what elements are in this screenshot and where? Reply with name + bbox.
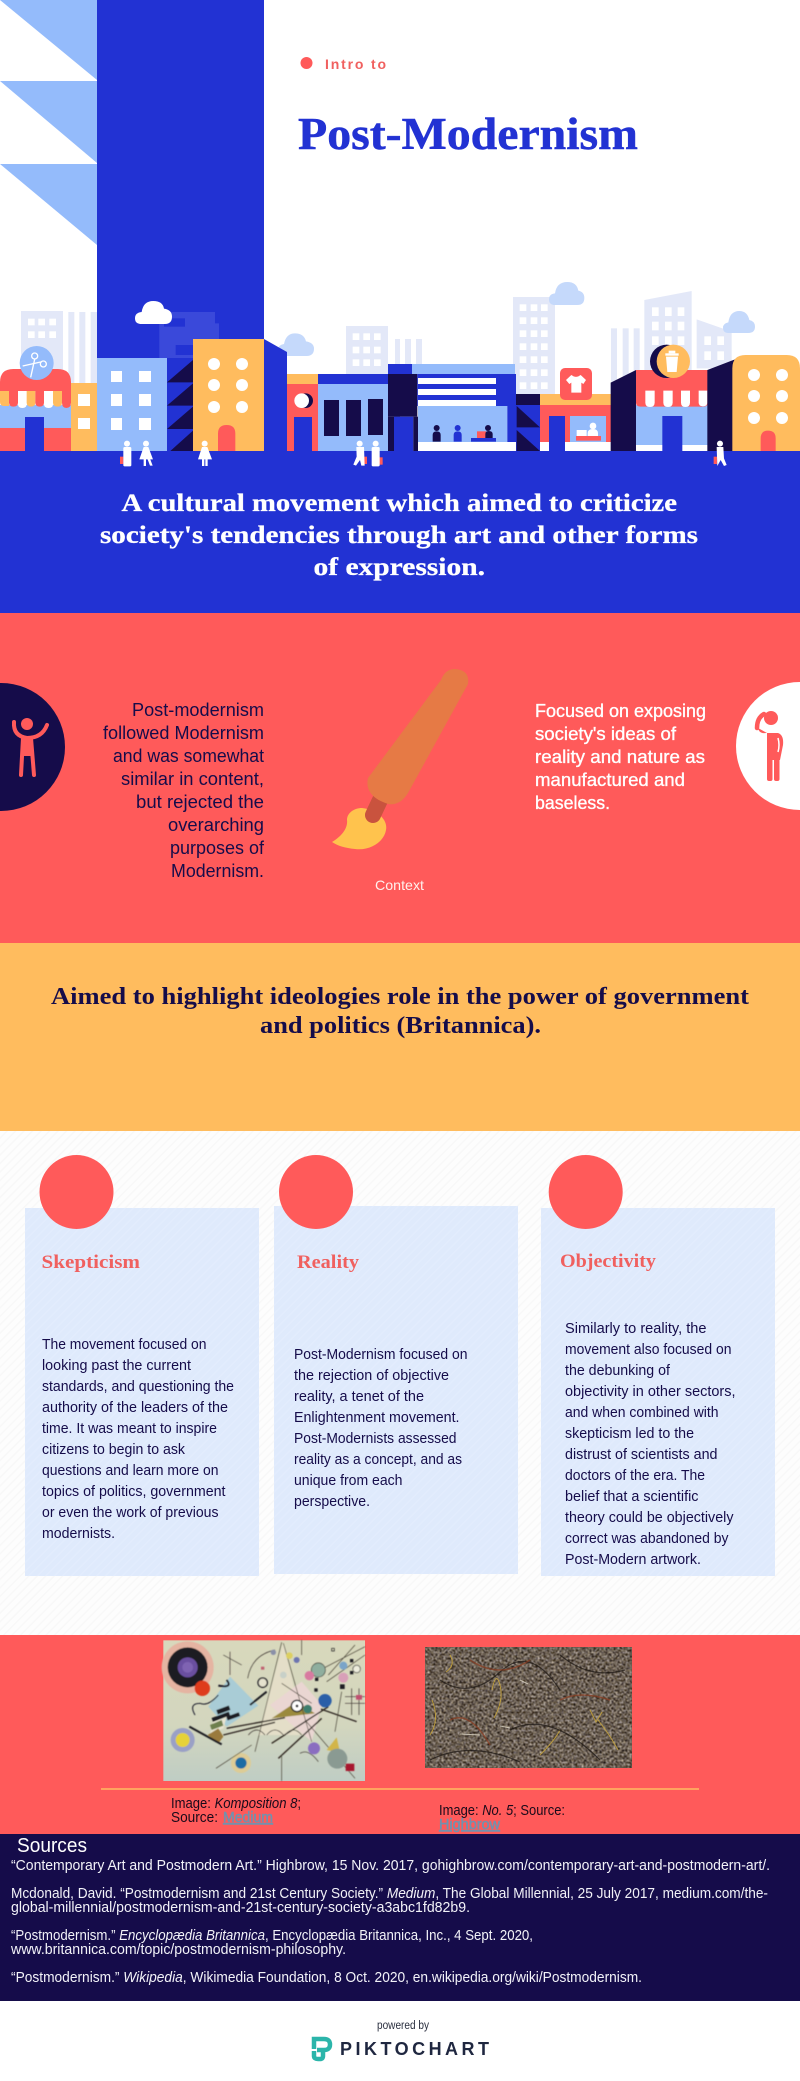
yellow small building [71, 383, 97, 451]
yellow tall building [193, 339, 287, 451]
body: Reality [294, 1347, 468, 1510]
intro statement: A cultural movement which aimed to criticize [122, 490, 677, 517]
light blue building [97, 358, 167, 451]
statement text: Aimed to highlight ideologies role in the power of government [51, 984, 749, 1010]
body: Skepticism: modernists. [42, 1526, 115, 1542]
left text: Post-modernism [132, 699, 264, 720]
icon: coffee cup [650, 345, 690, 378]
card: Objectivity [541, 1155, 775, 1576]
body: Skepticism: authority of the leaders of the [42, 1400, 228, 1416]
body: Objectivity: Post-Modern artwork. [565, 1552, 701, 1568]
pale building windows [28, 319, 381, 366]
body: Objectivity: distrust of scientists and [565, 1447, 718, 1463]
left text: Modernism. [171, 860, 264, 881]
body: Skepticism: topics of politics, government [42, 1484, 226, 1500]
body: Reality: the rejection of objective [294, 1368, 449, 1384]
intro statement [100, 490, 698, 581]
references: “Postmodernism.” Encyclopædia Britannica, Encyclopædia Britannica, Inc., 4 Sept. 2020, [11, 1927, 533, 1944]
panel: yellow statement [0, 943, 800, 1131]
panel: concepts [0, 1131, 800, 1635]
body: Skepticism: time. It was meant to inspire [42, 1421, 217, 1437]
references: “Contemporary Art and Postmodern Art.” Highbrow, 15 Nov. 2017, gohighbrow.com/contemporary-art-and-postmodern-art/. [11, 1857, 770, 1874]
caption: No. 5: Highbrow [439, 1816, 500, 1833]
right text: Focused on exposing [535, 700, 706, 721]
body: Reality: Post-Modernism focused on [294, 1347, 468, 1363]
right text: reality and nature as [535, 746, 705, 767]
body: Skepticism: The movement focused on [42, 1337, 206, 1353]
right text: society's ideas of [535, 723, 677, 744]
pale background buildings [21, 311, 400, 384]
cloud pale right [723, 311, 755, 333]
intro label: Intro to [325, 56, 386, 72]
intro statement: society's tendencies through art and other forms [100, 522, 698, 549]
left text [103, 699, 265, 881]
cloud white [135, 301, 172, 324]
body: Objectivity: Similarly to reality, the [565, 1321, 706, 1337]
body: Skepticism: questions and learn more on [42, 1463, 218, 1479]
stairs block [516, 394, 540, 451]
left text: purposes of [170, 837, 265, 858]
mall building [400, 364, 516, 452]
icon: person arms raised [0, 683, 65, 811]
divider line [101, 1788, 699, 1790]
small red store [287, 374, 318, 451]
cloud pale [278, 333, 314, 356]
body: Objectivity: the debunking of [565, 1363, 671, 1379]
icon: paintbrush [332, 669, 468, 849]
right text [535, 700, 706, 813]
pale background buildings [405, 291, 732, 395]
body: Objectivity: correct was abandoned by [565, 1531, 729, 1547]
yellow building right [707, 355, 800, 451]
body: Reality: perspective. [294, 1494, 370, 1510]
intro statement: of expression. [314, 554, 485, 581]
references [10, 1857, 770, 1986]
pale building windows [520, 304, 724, 389]
card: Skepticism [25, 1155, 259, 1576]
mall side [388, 364, 400, 451]
hero header [0, 0, 638, 360]
references: www.britannica.com/topic/postmodernism-philosophy. [10, 1941, 346, 1958]
body: Objectivity: doctors of the era. The [565, 1468, 705, 1484]
image: No. 5 [425, 1647, 632, 1768]
right text: baseless. [535, 792, 610, 813]
sources heading: Sources [17, 1835, 87, 1857]
body: Skepticism: standards, and questioning the [42, 1379, 234, 1395]
body: Reality: reality as a concept, and as [294, 1452, 462, 1468]
icon: Piktochart logo [314, 2039, 330, 2059]
city skyline right [400, 282, 800, 452]
caption: Komposition 8: Source: [171, 1809, 218, 1826]
references: global-millennial/postmodernism-and-21st-century-society-a3abc1fd82b9. [11, 1899, 470, 1916]
body: Reality: unique from each [294, 1473, 402, 1489]
references: Mcdonald, David. “Postmodernism and 21st Century Society.” Medium, The Global Millennial, 25 July 2017, medium.com/the- [11, 1885, 768, 1902]
left text: similar in content, [121, 768, 264, 789]
body: Skepticism [42, 1337, 234, 1542]
body: Skepticism: citizens to begin to ask [42, 1442, 186, 1458]
body: Reality: Enlightenment movement. [294, 1410, 460, 1426]
caption: Komposition 8: Image: Komposition 8; [171, 1795, 301, 1812]
panel: context red [0, 613, 800, 943]
footer: powered by Piktochart [314, 2020, 489, 2059]
references: “Postmodernism.” Wikipedia, Wikimedia Foundation, 8 Oct. 2020, en.wikipedia.org/wiki/Postmodernism. [11, 1969, 642, 1986]
icon: scissors [20, 346, 54, 380]
image: Komposition 8 [162, 1640, 365, 1781]
scissors store [0, 346, 71, 451]
awning store [611, 345, 708, 451]
body: Skepticism: or even the work of previous [42, 1505, 218, 1521]
statement text: and politics (Britannica). [260, 1013, 541, 1039]
icon: person thinking [736, 682, 800, 810]
body: Objectivity: objectivity in other sectors, [565, 1384, 736, 1400]
caption: Komposition 8 [171, 1795, 301, 1826]
decorative triangles [0, 0, 97, 245]
heading: Skepticism: Skepticism [42, 1252, 140, 1273]
body: Objectivity [565, 1321, 736, 1568]
left text: overarching [168, 814, 264, 835]
people on street [120, 441, 727, 466]
body: Objectivity: and when combined with [565, 1405, 718, 1421]
left text: but rejected the [136, 791, 264, 812]
heading: Objectivity: Objectivity [560, 1251, 657, 1272]
caption: No. 5: Image: No. 5; Source: [439, 1802, 565, 1819]
heading: Reality: Reality [297, 1252, 360, 1273]
icon: shirt sign [560, 368, 592, 400]
tone building on column [159, 312, 219, 360]
title: Post-Modernism [298, 109, 638, 159]
statement text [51, 984, 749, 1039]
left text: followed Modernism [103, 722, 264, 743]
stairs block [167, 358, 193, 451]
blue column [97, 0, 264, 360]
body: Objectivity: belief that a scientific [565, 1489, 698, 1505]
panel: intro blue band [0, 441, 800, 613]
body: Objectivity: skepticism led to the [565, 1426, 694, 1442]
card: Reality [274, 1155, 518, 1574]
body: Reality: Post-Modernists assessed [294, 1431, 456, 1447]
panel: artworks [0, 1635, 800, 1834]
caption: Komposition 8: Medium [223, 1809, 273, 1826]
wordmark: PIKTOCHART [340, 2039, 489, 2059]
panel: sources [0, 1834, 800, 2001]
powered by: powered by [377, 2020, 429, 2032]
context label: Context [375, 877, 424, 893]
left text: and was somewhat [113, 745, 264, 766]
light blue store [318, 374, 388, 451]
shirt store [540, 368, 612, 451]
caption: No. 5 [439, 1802, 565, 1833]
body: Objectivity: theory could be objectively [565, 1510, 734, 1526]
right text: manufactured and [535, 769, 685, 790]
city skyline left [0, 301, 400, 451]
cloud pale center [549, 282, 584, 305]
body: Reality: reality, a tenet of the [294, 1389, 424, 1405]
body: Objectivity: movement also focused on [565, 1342, 732, 1358]
body: Skepticism: looking past the current [42, 1358, 191, 1374]
